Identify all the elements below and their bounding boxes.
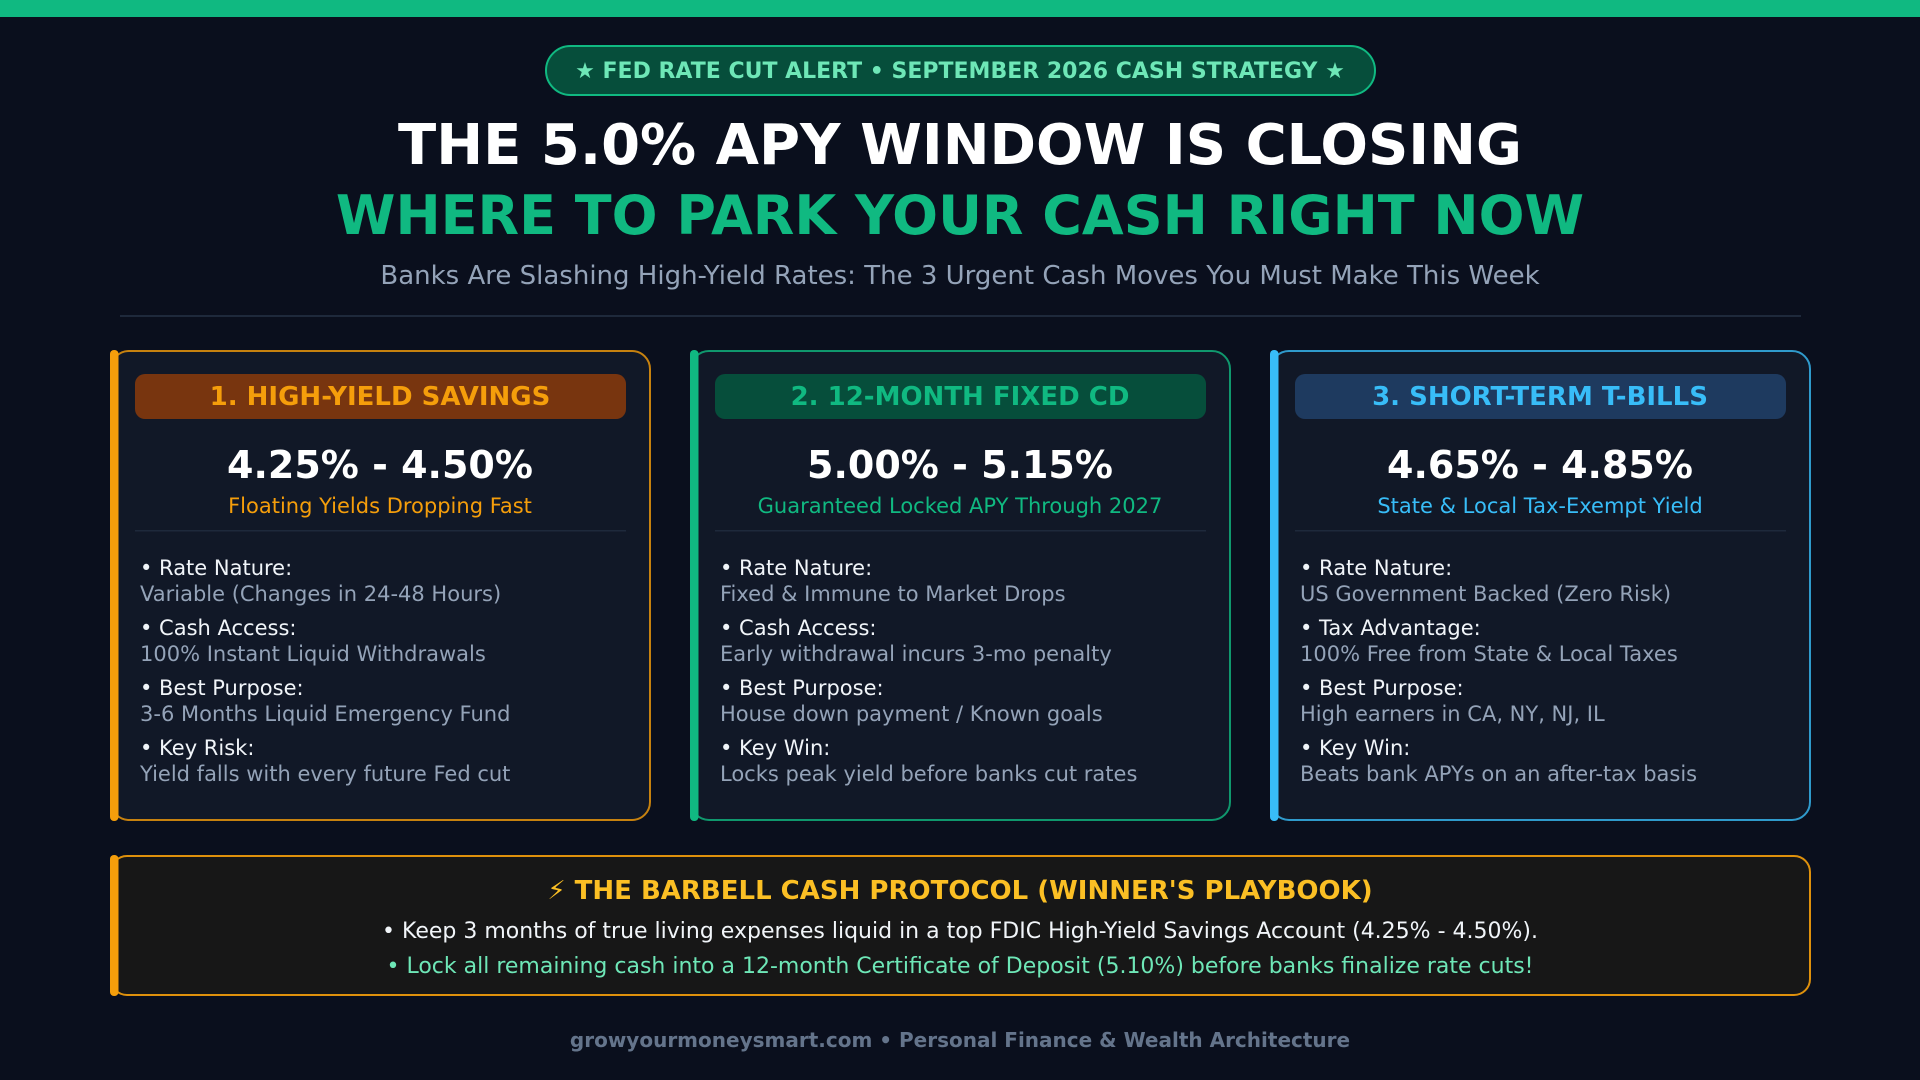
top accent bar — [0, 0, 1920, 17]
title line 2: WHERE TO PARK YOUR CASH RIGHT NOW — [336, 184, 1584, 247]
alert badge — [546, 46, 1375, 95]
header: savings — [135, 374, 626, 419]
rate: savings: 4.25% - 4.50% — [227, 443, 533, 487]
alert badge: ★ FED RATE CUT ALERT • SEPTEMBER 2026 CASH STRATEGY ★ — [575, 59, 1345, 84]
rate note: T-bills: State & Local Tax-Exempt Yield — [1377, 494, 1703, 518]
details: T-bills — [1300, 556, 1697, 786]
rate: CD: 5.00% - 5.15% — [807, 443, 1113, 487]
details: CD: • Key Win: — [720, 736, 830, 760]
callout heading: ⚡ THE BARBELL CASH PROTOCOL (WINNER'S PLAYBOOK) — [547, 876, 1373, 906]
details: T-bills: 100% Free from State & Local Taxes — [1300, 642, 1678, 666]
callout line 2: • Lock all remaining cash into a 12-month Certificate of Deposit (5.10%) before banks finalize rate cuts! — [386, 954, 1534, 979]
details: savings — [139, 556, 510, 786]
details: savings: • Key Risk: — [140, 736, 254, 760]
header: CD: 2. 12-MONTH FIXED CD — [791, 382, 1129, 412]
callout line 1: • Keep 3 months of true living expenses liquid in a top FDIC High-Yield Savings Account (4.25% - 4.50%). — [382, 919, 1538, 944]
details: savings: • Cash Access: — [140, 616, 296, 640]
panel: short-term T-bills — [1270, 350, 1810, 821]
subtitle: Banks Are Slashing High-Yield Rates: The 3 Urgent Cash Moves You Must Make This Week — [380, 261, 1540, 291]
details: T-bills: • Best Purpose: — [1300, 676, 1464, 700]
details: CD: House down payment / Known goals — [720, 702, 1103, 726]
details: savings: • Rate Nature: — [140, 556, 292, 580]
rate note: CD: Guaranteed Locked APY Through 2027 — [758, 494, 1162, 518]
details: savings: 100% Instant Liquid Withdrawals — [140, 642, 486, 666]
details: CD: Early withdrawal incurs 3-mo penalty — [720, 642, 1112, 666]
details: T-bills: US Government Backed (Zero Risk) — [1300, 582, 1671, 606]
rate: T-bills: 4.65% - 4.85% — [1387, 443, 1693, 487]
details: CD: Fixed & Immune to Market Drops — [720, 582, 1066, 606]
header: savings: 1. HIGH-YIELD SAVINGS — [210, 382, 550, 412]
details: CD: • Cash Access: — [720, 616, 876, 640]
panel: high-yield savings — [110, 350, 650, 821]
details: T-bills: Beats bank APYs on an after-tax basis — [1300, 762, 1697, 786]
rate note: savings: Floating Yields Dropping Fast — [228, 494, 532, 518]
details: savings: • Best Purpose: — [140, 676, 304, 700]
details: savings: 3-6 Months Liquid Emergency Fund — [140, 702, 510, 726]
details: T-bills: • Tax Advantage: — [1300, 616, 1481, 640]
details: T-bills: • Key Win: — [1300, 736, 1410, 760]
details: savings: Variable (Changes in 24-48 Hours) — [140, 582, 501, 606]
header: T-bills: 3. SHORT-TERM T-BILLS — [1372, 382, 1708, 412]
details: CD: • Best Purpose: — [720, 676, 884, 700]
callout: barbell cash protocol — [110, 855, 1810, 996]
details: T-bills: • Rate Nature: — [1300, 556, 1452, 580]
details: CD: • Rate Nature: — [720, 556, 872, 580]
title line 1: THE 5.0% APY WINDOW IS CLOSING — [398, 113, 1522, 178]
details: T-bills: High earners in CA, NY, NJ, IL — [1300, 702, 1605, 726]
footer: growyourmoneysmart.com • Personal Finance & Wealth Architecture — [570, 1028, 1350, 1052]
header: T-bills — [1295, 374, 1786, 419]
panel: 12-month fixed CD — [690, 350, 1230, 821]
details: savings: Yield falls with every future Fed cut — [139, 762, 510, 786]
header: CD — [715, 374, 1206, 419]
details: CD — [720, 556, 1137, 786]
details: CD: Locks peak yield before banks cut rates — [720, 762, 1137, 786]
